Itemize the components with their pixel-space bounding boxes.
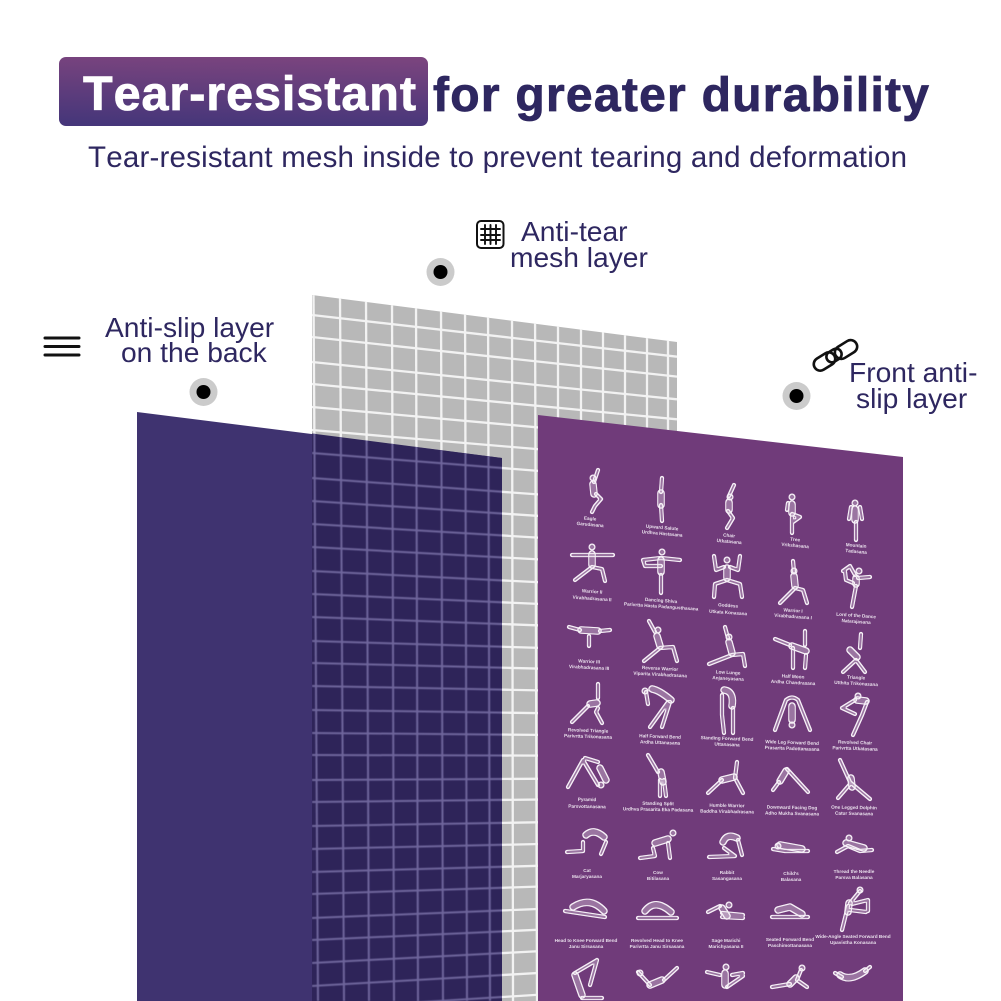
- label: anti-slip layer on the back: on the back: [121, 336, 268, 368]
- mesh seen through the back layer: [312, 434, 502, 1001]
- pose: Reverse Warrior: [633, 621, 687, 678]
- pose: Child's: Child's: [783, 871, 799, 876]
- title: [59, 57, 929, 126]
- pose: Revolved Chair: [832, 696, 878, 752]
- pose: Child's: [773, 845, 808, 882]
- pose: Standing Forward Bend: [701, 690, 754, 747]
- pose: Warrior II: Virabhadrasana II: [572, 595, 612, 602]
- pose: Tree: [781, 497, 809, 549]
- pose: Warrior I: Warrior I: [783, 607, 803, 614]
- pose: Dancing Shiva: [624, 552, 699, 612]
- pose: Revolved Chair: Parivrtta Utkatasana: [832, 745, 878, 752]
- pose: Chair: Utkatasana: [716, 538, 742, 545]
- pose: Pyramid: Pyramid: [578, 797, 596, 802]
- pose: Wide-Angle Seated Forward Bend: [815, 890, 891, 945]
- pose: Revolved Triangle: Parivrtta Trikonasana: [564, 733, 612, 740]
- pose: Half Moon: Half Moon: [782, 673, 805, 680]
- pose: Half Forward Bend: Half Forward Bend: [639, 733, 681, 740]
- pose: Downward Facing Dog: Adho Mukha Svanasana: [765, 811, 819, 816]
- pose: Revolved Triangle: [564, 684, 612, 740]
- pose: Wide-Angle Seated Forward Bend: Upavistha Konasana: [830, 940, 876, 945]
- pose: Triangle: [834, 634, 878, 687]
- pose: Head to Knee Forward Bend: [555, 902, 618, 949]
- pose: Cat: Cat: [583, 868, 591, 873]
- pose: Sage Marichi: Marichyasana II: [709, 944, 743, 949]
- marker dot: mesh layer: [426, 258, 454, 286]
- label: anti-tear mesh layer: Anti-tear: [521, 215, 628, 247]
- marker dot: back layer: [190, 378, 218, 406]
- pose: Rabbit: [709, 836, 742, 881]
- pose: Standing Split: Urdhva Prasarita Eka Padasana: [623, 806, 694, 813]
- panel: back anti-slip layer: [137, 412, 502, 1001]
- pose: Cat: [567, 832, 606, 879]
- pose: Half Forward Bend: Ardha Uttanasana: [640, 739, 681, 746]
- pose: Downward Facing Dog: Downward Facing Dog: [767, 805, 817, 810]
- pose: Low Lunge: Anjaneyasana: [712, 675, 744, 682]
- pose: Wide Leg Forward Bend: [765, 698, 820, 752]
- pose: One Legged Dolphin: One Legged Dolphin: [831, 805, 877, 810]
- label: anti-slip layer on the back: Anti-slip layer: [105, 311, 274, 343]
- pose: Upward Salute: [642, 478, 683, 538]
- subtitle: Tear-resistant mesh inside to prevent tearing and deformation: [88, 141, 907, 174]
- pose: Low Lunge: [709, 627, 745, 682]
- label: front anti-slip layer: Front anti-: [849, 356, 977, 388]
- title highlight badge: [59, 57, 428, 126]
- pose: Eagle: Garudasana: [576, 521, 604, 528]
- pose: Goddess: [709, 556, 748, 616]
- pose: Cow: Bitilasana: [647, 876, 669, 881]
- title remainder: for greater durability: [433, 69, 929, 122]
- panel: anti-tear mesh layer: [312, 295, 677, 1001]
- pose: Half Moon: [771, 631, 816, 686]
- pose: Pyramid: [568, 758, 606, 809]
- pose: Cow: Cow: [653, 870, 663, 875]
- pose: Lord of the Dance: Natarajasana: [841, 618, 871, 625]
- pose: Wide Leg Forward Bend: Wide Leg Forward Bend: [765, 739, 819, 746]
- icon: mesh grid: [477, 221, 504, 248]
- icon: anti-slip lines: [45, 338, 79, 355]
- pose: Warrior III: [569, 627, 610, 671]
- pose: Head to Knee Forward Bend: Janu Sirsasana: [569, 944, 604, 949]
- pose: Wide Leg Forward Bend: Prasarita Padottanasana: [765, 745, 820, 752]
- label: front anti-slip layer: slip layer: [856, 382, 967, 414]
- pose: Lord of the Dance: Lord of the Dance: [836, 612, 877, 619]
- pose: Mountain: Mountain: [846, 542, 867, 549]
- pose: Warrior III: Warrior III: [578, 658, 600, 665]
- pose: Low Lunge: Low Lunge: [716, 669, 741, 676]
- pose: Seated Forward Bend: [766, 907, 814, 948]
- pose: Upward Salute: Upward Salute: [646, 524, 679, 531]
- pose: Warrior II: [572, 547, 613, 602]
- pose: Cow: [640, 833, 673, 881]
- pose: Standing Forward Bend: Standing Forward Bend: [701, 735, 754, 742]
- pose: Seated Forward Bend: Seated Forward Bend: [766, 937, 814, 942]
- pose: Eagle: Eagle: [584, 515, 597, 522]
- pose: Sage Marichi: Sage Marichi: [712, 938, 740, 943]
- pose: bottom row 3: [707, 967, 743, 987]
- pose: Reverse Warrior: Reverse Warrior: [642, 665, 678, 672]
- marker dot: front layer: [782, 382, 810, 410]
- pose: Triangle: Utthita Trikonasana: [834, 680, 878, 687]
- pose: Humble Warrior: Baddha Virabhadrasana: [700, 809, 754, 814]
- panel: front anti-slip layer with yoga poses: [538, 415, 903, 1001]
- pose: Warrior II: Warrior II: [582, 588, 603, 595]
- pose: Warrior I: [774, 561, 812, 620]
- pose: Revolved Head to Knee: [630, 905, 685, 949]
- pose: Revolved Chair: Revolved Chair: [838, 739, 872, 746]
- pose: Head to Knee Forward Bend: Head to Knee Forward Bend: [555, 938, 618, 943]
- pose: bottom row 2: [638, 968, 677, 985]
- pose: bottom row 5: [835, 967, 870, 978]
- pose: Dancing Shiva: Parivrtta Hasta Padangusthasana: [624, 601, 699, 612]
- pose: Goddess: Goddess: [718, 602, 739, 609]
- pose: Chair: [716, 485, 742, 545]
- label: front anti-slip layer: [849, 356, 977, 414]
- pose: Lord of the Dance: [836, 566, 877, 625]
- pose: Child's: Balasana: [781, 877, 802, 882]
- pose: Half Forward Bend: [639, 689, 681, 746]
- pose: Dancing Shiva: Dancing Shiva: [645, 597, 678, 604]
- pose: Pyramid: Parsvottanasana: [568, 804, 606, 809]
- icon: chain link: [811, 338, 860, 373]
- pose: Chair: Chair: [723, 532, 735, 539]
- pose: Standing Split: Standing Split: [642, 801, 674, 806]
- pose: Triangle: Triangle: [847, 675, 866, 680]
- pose: Warrior I: Virabhadrasana I: [774, 613, 812, 620]
- pose: Sage Marichi: [708, 905, 743, 949]
- pose: Rabbit: Rabbit: [720, 870, 735, 875]
- title highlighted word: Tear-resistant: [83, 67, 416, 121]
- pose: Mountain: [845, 503, 868, 555]
- pose: Standing Forward Bend: Uttanasana: [714, 742, 740, 747]
- pose: Wide-Angle Seated Forward Bend: Wide-Angle Seated Forward Bend: [815, 934, 891, 939]
- pose: Downward Facing Dog: [765, 769, 819, 816]
- pose: Mountain: Tadasana: [845, 548, 868, 555]
- label: anti-slip layer on the back: [105, 311, 274, 368]
- label: anti-tear mesh layer: [510, 215, 648, 273]
- pose: One Legged Dolphin: [831, 760, 877, 816]
- pose: One Legged Dolphin: Catur Svanasana: [835, 811, 873, 816]
- pose: Goddess: Utkata Konasana: [709, 609, 748, 616]
- pose: Thread the Needle: [834, 838, 875, 880]
- pose: bottom row 1: [575, 960, 602, 998]
- pose: Reverse Warrior: Viparita Virabhadrasana: [633, 671, 687, 678]
- label: anti-tear mesh layer: mesh layer: [510, 241, 648, 273]
- pose: Tree: Vrikshasana: [781, 542, 809, 549]
- pose: Standing Split: [623, 755, 694, 813]
- pose: Thread the Needle: Parsva Balasana: [835, 875, 873, 880]
- pose: Humble Warrior: [700, 762, 754, 814]
- pose: Seated Forward Bend: Paschimottanasana: [768, 943, 812, 948]
- pose: Cat: Marjaryasana: [572, 874, 602, 879]
- pose: Upward Salute: Urdhva Hastasana: [642, 529, 683, 538]
- pose: Rabbit: Sasangasana: [712, 876, 742, 881]
- pose: Humble Warrior: Humble Warrior: [709, 803, 745, 808]
- pose: bottom row 4: [772, 968, 807, 987]
- pose: Tree: Tree: [790, 537, 801, 542]
- pose: Revolved Triangle: Revolved Triangle: [568, 727, 609, 734]
- pose: Half Moon: Ardha Chandrasana: [771, 679, 816, 686]
- pose: Revolved Head to Knee: Parivrtta Janu Sirsasana: [630, 944, 685, 949]
- pose: Thread the Needle: Thread the Needle: [834, 869, 875, 874]
- pose: Eagle: [576, 470, 604, 528]
- pose: Revolved Head to Knee: Revolved Head to Knee: [631, 938, 683, 943]
- pose: Warrior III: Virabhadrasana III: [569, 664, 609, 671]
